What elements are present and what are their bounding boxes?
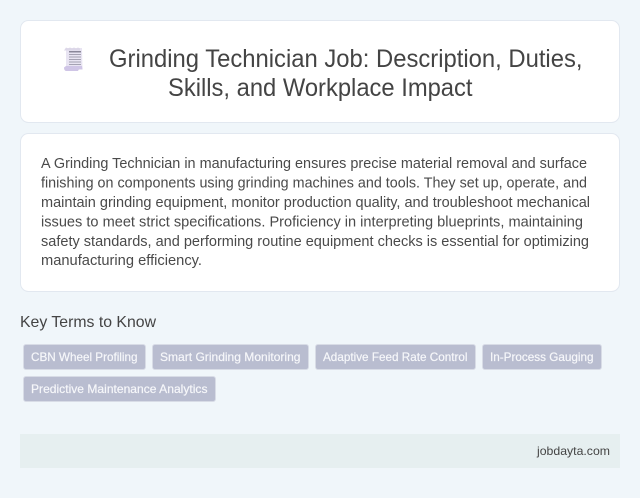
panel: title card [20, 20, 620, 122]
chip: Smart Grinding Monitoring: Smart Grinding Monitoring [160, 350, 300, 364]
footer: jobdayta.com [536, 444, 610, 458]
chip: CBN Wheel Profiling [24, 344, 146, 370]
chip: In-Process Gauging [482, 344, 602, 370]
chip: Smart Grinding Monitoring [152, 344, 308, 370]
text block: description [41, 156, 590, 269]
chip: Adaptive Feed Rate Control: Adaptive Feed Rate Control [323, 350, 468, 364]
text block: description: finishing on components using grinding machines and tools. They set up, operate, and [41, 176, 587, 192]
title: Skills, and Workplace Impact [168, 74, 473, 102]
chip: Predictive Maintenance Analytics: Predictive Maintenance Analytics [31, 382, 208, 396]
panel: description [20, 134, 620, 292]
chip: In-Process Gauging: In-Process Gauging [490, 350, 594, 364]
text block: description: issues to meet strict specifications. Proficiency in interpreting blueprints, maintaining [41, 214, 583, 230]
title: Grinding Technician Job: Description, Duties, [109, 45, 582, 73]
footer [20, 434, 620, 468]
text block: description: A Grinding Technician in manufacturing ensures precise material removal and surface [41, 156, 587, 172]
chip: Predictive Maintenance Analytics [24, 376, 216, 402]
chip: CBN Wheel Profiling: CBN Wheel Profiling [31, 350, 138, 364]
heading: key terms: Key Terms to Know [20, 314, 156, 331]
title [109, 45, 582, 102]
icon: paper scroll [64, 48, 82, 71]
text block: description: safety standards, and performing routine equipment checks is essential for optimizing [41, 234, 589, 250]
text block: description: maintain grinding equipment, monitor production quality, and troubleshoot mechanical [41, 195, 590, 211]
text block: description: manufacturing efficiency. [41, 253, 202, 269]
chip: Adaptive Feed Rate Control [316, 344, 476, 370]
